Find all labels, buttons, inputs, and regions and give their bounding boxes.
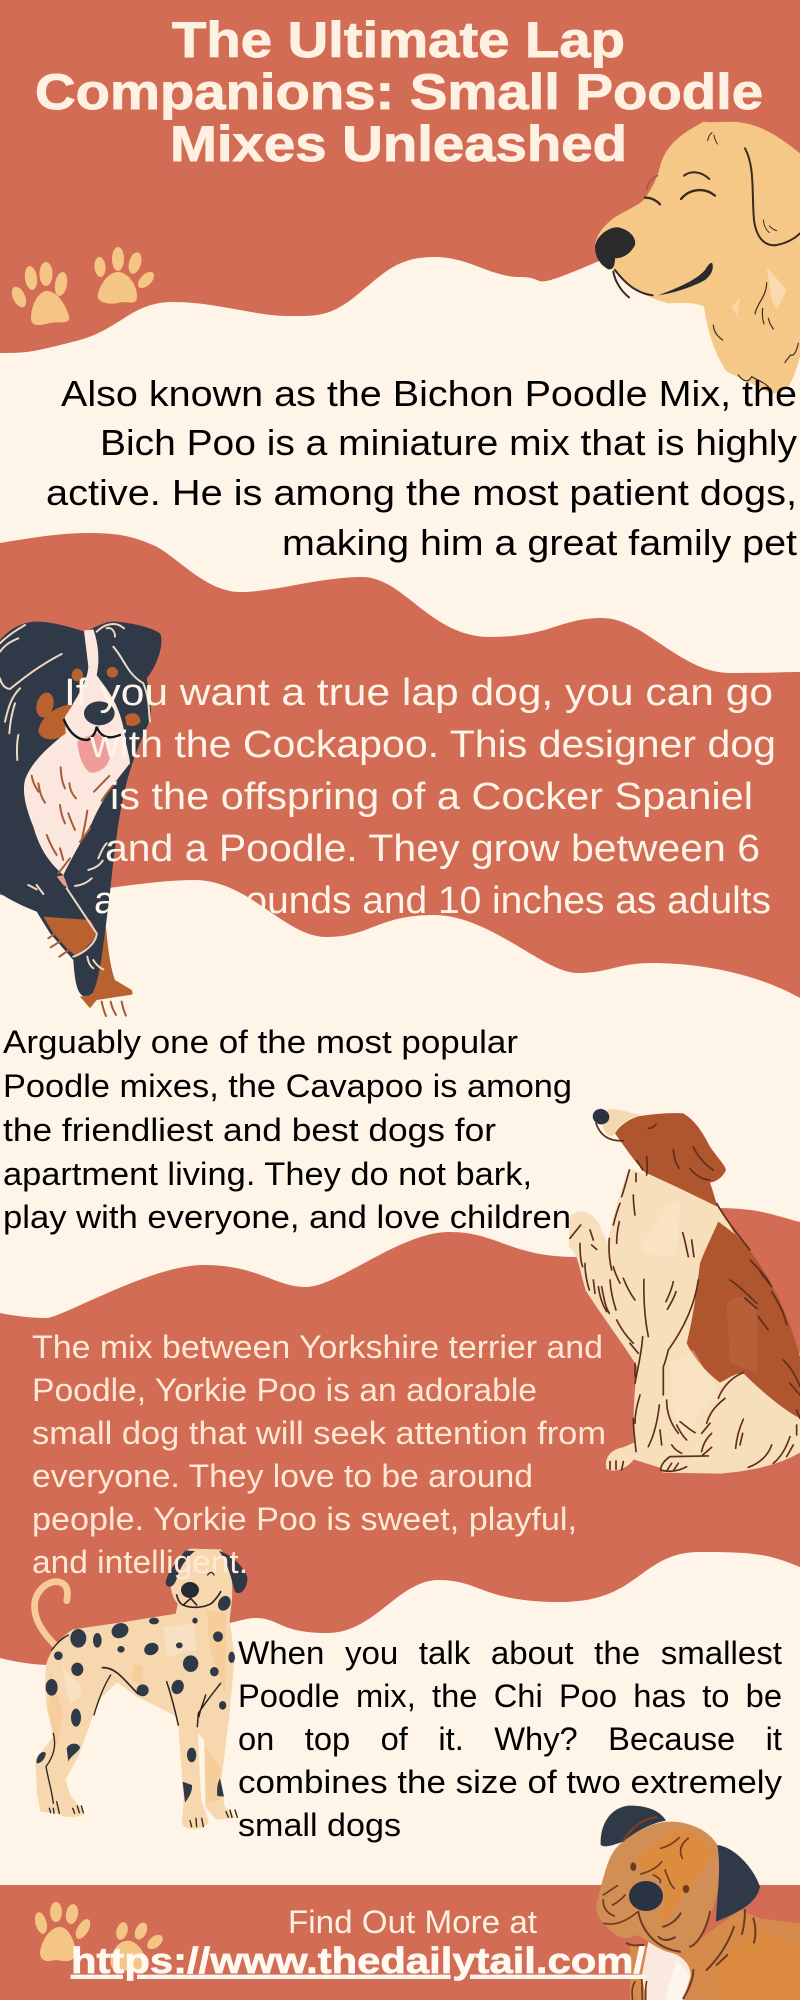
text block: Yorkie Poo: people. Yorkie Poo is sweet, playful, <box>32 1501 577 1537</box>
wave: second band <box>0 533 800 998</box>
text block: Cockapoo: If you want a true lap dog, you can go <box>64 672 773 714</box>
text block: Bich Poo: Bich Poo is a miniature mix that is highly <box>100 422 797 463</box>
fur lines <box>0 624 150 969</box>
text block: Bich Poo: active. He is among the most patient dogs, <box>46 472 797 513</box>
paw: top right <box>94 247 157 304</box>
text block: Bich Poo: making him a great family pet <box>282 522 797 563</box>
footer call to action: Find Out More at <box>288 1904 537 1940</box>
text block: Chi Poo: on top of it. Why? Because it <box>238 1721 782 1757</box>
text block: Yorkie Poo: small dog that will seek attention from <box>32 1415 606 1451</box>
text block: Cavapoo: apartment living. They do not bark, <box>3 1156 532 1192</box>
text block: Yorkie Poo: Poodle, Yorkie Poo is an adorable <box>32 1372 537 1408</box>
footer call to action <box>71 1904 645 1981</box>
text block: Cavapoo: Arguably one of the most popular <box>3 1024 518 1060</box>
text block: Yorkie Poo: everyone. They love to be around <box>32 1458 533 1494</box>
text block: Cockapoo: with the Cockapoo. This designer dog <box>89 724 776 766</box>
text block: Chi Poo: Poodle mix, the Chi Poo has to be <box>238 1678 782 1714</box>
paw: footer left <box>33 1902 93 1961</box>
icon: bulldog <box>596 1806 800 2000</box>
title: Companions: Small Poodle <box>35 64 763 120</box>
text block: Cavapoo: Poodle mixes, the Cavapoo is among <box>3 1068 572 1104</box>
text block: Cockapoo: is the offspring of a Cocker Spaniel <box>110 776 753 818</box>
text block: Chi Poo <box>238 1635 782 1843</box>
text block: Cavapoo: play with everyone, and love children <box>3 1199 571 1235</box>
icon: sitting collie <box>570 1107 800 1473</box>
text block: Cockapoo: and a Poodle. They grow between 6 <box>105 828 760 870</box>
markings <box>34 667 141 1008</box>
text block: Yorkie Poo: The mix between Yorkshire terrier and <box>32 1329 603 1365</box>
icon: golden retriever head <box>595 122 800 393</box>
footer band <box>0 1885 800 2000</box>
paw: footer right <box>110 1921 165 1972</box>
title <box>35 12 763 172</box>
text block: Cavapoo <box>3 1024 572 1235</box>
icon: Bernese mountain dog <box>0 621 161 1016</box>
text block: Bich Poo: Also known as the Bichon Poodle Mix, the <box>61 373 797 414</box>
footer call to action: https://www.thedailytail.com/ <box>71 1940 645 1981</box>
text block: Cockapoo <box>64 672 776 922</box>
wave: top band <box>0 0 800 353</box>
title: Mixes Unleashed <box>170 116 627 172</box>
text block: Yorkie Poo <box>32 1329 606 1580</box>
wave: third band <box>0 1208 800 1665</box>
text block: Chi Poo: When you talk about the smallest <box>238 1635 782 1671</box>
text block: Bich Poo <box>46 373 797 563</box>
text block: Chi Poo: small dogs <box>238 1807 401 1843</box>
text block: Chi Poo: combines the size of two extremely <box>238 1764 782 1800</box>
title: The Ultimate Lap <box>172 12 625 68</box>
icon: dalmatian <box>35 1550 247 1828</box>
text block: Cavapoo: the friendliest and best dogs for <box>3 1112 496 1148</box>
paw: top left <box>9 262 69 325</box>
text block: Cockapoo: and 14 pounds and 10 inches as adults <box>94 880 771 922</box>
text block: Yorkie Poo: and intelligent. <box>32 1544 248 1580</box>
